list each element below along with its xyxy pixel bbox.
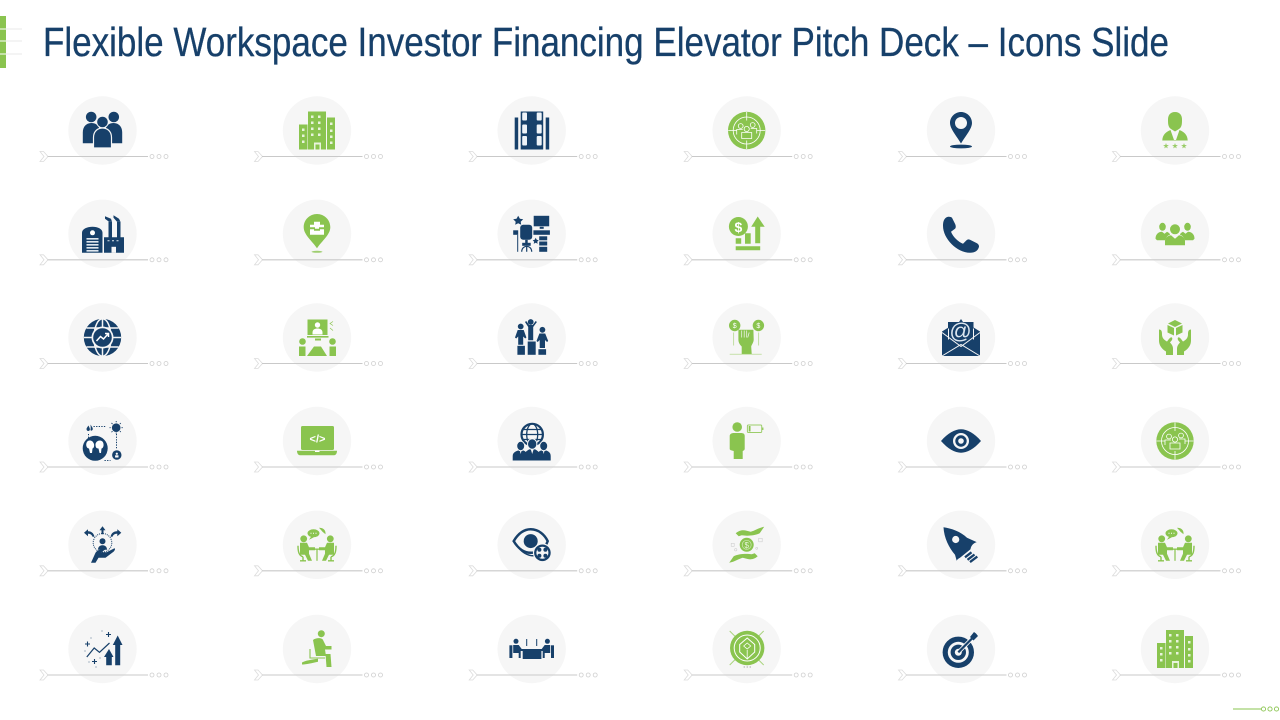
icon: eye xyxy=(941,429,981,453)
icon: group of people xyxy=(83,112,122,148)
cell: people team xyxy=(40,96,168,165)
cell: office building xyxy=(254,96,382,165)
cell: three staff xyxy=(1112,200,1240,268)
cell: briefcase pin xyxy=(254,200,382,268)
icon: audience target xyxy=(1156,422,1194,460)
icon: audience target xyxy=(728,112,765,149)
cell: businesswoman rating xyxy=(1112,96,1240,165)
cell: meeting green 2 xyxy=(1112,511,1240,579)
icon: trees, water and sun cycle xyxy=(83,421,123,461)
cell: film strip xyxy=(469,96,597,165)
cell: growth chart xyxy=(40,615,168,683)
icon: globe above business team xyxy=(513,424,551,460)
icon: hands exchanging dollar: $ xyxy=(744,541,749,550)
cell: target audience 2 xyxy=(1112,407,1240,475)
cell: office desk xyxy=(469,200,597,268)
icon: building xyxy=(1157,630,1193,668)
corner tab decoration xyxy=(0,16,22,68)
cell: money exchange xyxy=(684,511,812,579)
icon: rising arrows and sparkles xyxy=(84,631,122,667)
cell: location pin xyxy=(898,96,1026,165)
icon: two people meeting xyxy=(298,528,336,561)
icon: globe with trend xyxy=(84,319,121,356)
icon: two people meeting xyxy=(1156,528,1194,561)
icon: hands holding cube xyxy=(1159,320,1191,355)
icon: laptop with code: </> xyxy=(310,434,325,446)
icon: raised fist with coins xyxy=(729,320,764,354)
icon: eye with film reel xyxy=(514,529,552,562)
icon: film strip xyxy=(515,112,549,150)
icon: people on podium xyxy=(515,319,548,355)
icon: briefcase location pin xyxy=(304,214,330,253)
cell: eye with film xyxy=(469,511,597,579)
icon: phone handset xyxy=(943,217,979,253)
icon: raised fist with coins: $ xyxy=(733,323,737,330)
icon: crossed target xyxy=(730,631,764,667)
cell: phone xyxy=(898,200,1026,268)
cell: rocket xyxy=(898,511,1026,579)
footer connector xyxy=(1233,707,1279,711)
icon: team of three xyxy=(1156,223,1194,245)
icon: rocket xyxy=(944,527,977,562)
cell: dollar growth xyxy=(684,200,812,268)
icon: office desk and chair xyxy=(513,216,550,252)
cell: opportunity directions xyxy=(40,511,168,579)
cell: target diagram xyxy=(684,615,812,683)
icon: raised fist with coins: $ xyxy=(756,323,760,330)
cell: meeting green xyxy=(254,511,382,579)
icon: envelope with at sign: @ xyxy=(949,318,972,344)
cell: global team xyxy=(469,407,597,475)
icon: bullseye and arrow xyxy=(943,632,978,668)
cell: fist funding xyxy=(684,303,812,372)
cell: board meeting xyxy=(469,615,597,683)
cell: low energy person xyxy=(684,407,812,475)
icon: board meeting table xyxy=(509,639,554,659)
cell: presentation xyxy=(254,303,382,372)
cell: podium xyxy=(469,303,597,372)
cell: eye vision xyxy=(898,407,1026,475)
cell: environment xyxy=(40,407,168,475)
icon: video conference xyxy=(299,320,336,356)
cell: office building 2 xyxy=(1112,615,1240,683)
cell: email xyxy=(898,303,1026,372)
icon: factory xyxy=(82,215,124,253)
icon: dollar growth arrow: $ xyxy=(735,219,743,235)
cell: coding laptop xyxy=(254,407,382,475)
icon: person seated in chair xyxy=(302,630,332,667)
cell: target audience xyxy=(684,96,812,165)
cell: hands and cube xyxy=(1112,303,1240,372)
cell: seated person xyxy=(254,615,382,683)
icon: building xyxy=(299,112,335,150)
icon: person with battery xyxy=(730,422,763,459)
cell: global growth xyxy=(40,303,168,372)
icon: businesswoman with stars xyxy=(1162,112,1188,148)
cell: bullseye xyxy=(898,615,1026,683)
cell: factory xyxy=(40,200,168,268)
icon: location pin xyxy=(950,112,972,148)
icon: hand with person and arrows xyxy=(84,526,121,563)
